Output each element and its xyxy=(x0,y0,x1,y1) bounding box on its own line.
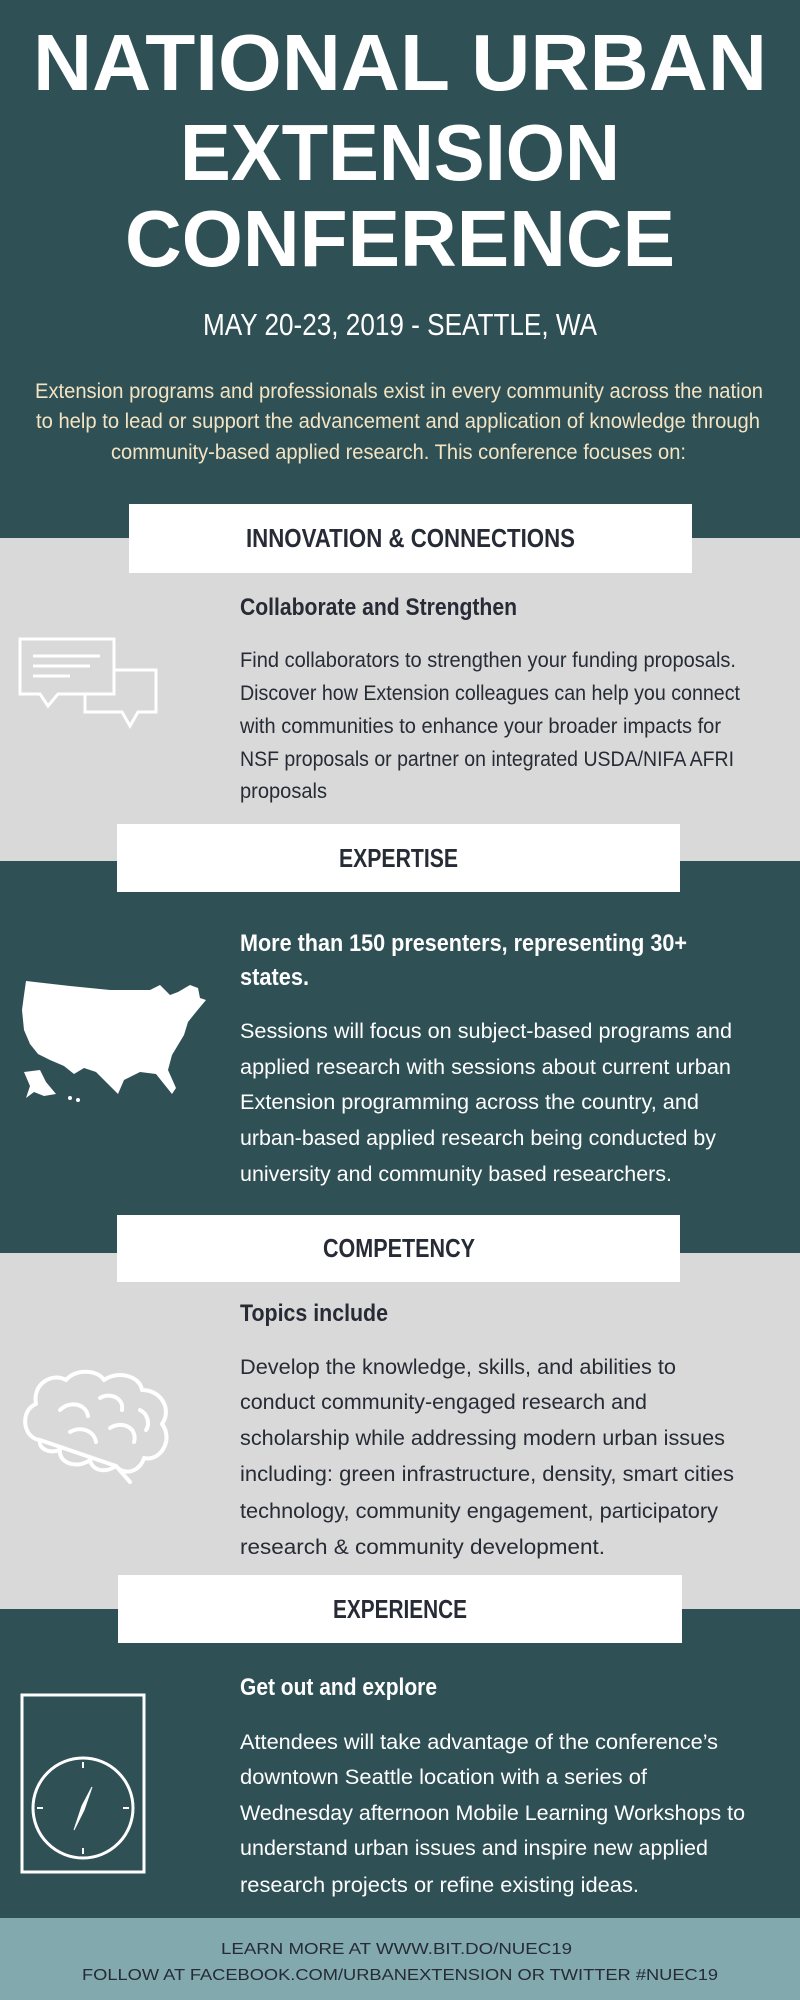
section 4 text xyxy=(240,1674,745,1897)
intro paragraph: to help to lead or support the advancement and application of knowledge through xyxy=(36,410,760,433)
section 3 text: Topics include xyxy=(240,1300,388,1327)
header box: expertise xyxy=(117,824,680,892)
footer band: LEARN MORE AT WWW.BIT.DO/NUEC19 xyxy=(221,1941,572,1958)
section 3 text: Develop the knowledge, skills, and abilities to xyxy=(240,1356,676,1379)
icon: chat bubbles xyxy=(20,639,156,726)
date and location: MAY 20-23, 2019 - SEATTLE, WA xyxy=(203,307,597,342)
footer band: FOLLOW AT FACEBOOK.COM/URBANEXTENSION OR TWITTER #NUEC19 xyxy=(82,1967,718,1984)
section 4 text: Wednesday afternoon Mobile Learning Workshops to xyxy=(240,1802,745,1825)
section 2 text: states. xyxy=(240,964,309,991)
header box: experience xyxy=(118,1575,682,1643)
section 2 text: Extension programming across the country, and xyxy=(240,1091,699,1114)
section 3 text: conduct community-engaged research and xyxy=(240,1391,647,1414)
title: NATIONAL URBAN xyxy=(33,18,767,107)
intro paragraph xyxy=(35,380,763,464)
section 1 text: proposals xyxy=(240,780,327,803)
section 4 text: research projects or refine existing ideas. xyxy=(240,1874,639,1897)
section 3 text: technology, community engagement, participatory xyxy=(240,1500,719,1523)
footer band xyxy=(0,1918,800,2000)
header box: innovation & connections: INNOVATION & CONNECTIONS xyxy=(246,523,575,553)
title: CONFERENCE xyxy=(125,194,675,283)
header box: expertise: EXPERTISE xyxy=(339,843,458,873)
icon: brain xyxy=(25,1372,167,1482)
section 1 text: NSF proposals or partner on integrated USDA/NIFA AFRI xyxy=(240,748,734,771)
header box: competency: COMPETENCY xyxy=(323,1233,475,1263)
intro paragraph: Extension programs and professionals exist in every community across the nation xyxy=(35,380,763,403)
icon: US map xyxy=(22,981,206,1102)
section 4 text: Attendees will take advantage of the conference’s xyxy=(240,1731,718,1754)
section 2 text: university and community based researchers. xyxy=(240,1163,672,1186)
section 4 text: Get out and explore xyxy=(240,1674,437,1701)
section 2 text: More than 150 presenters, representing 30+ xyxy=(240,930,687,957)
header box: competency xyxy=(117,1215,680,1282)
section 1 text xyxy=(239,594,740,803)
title: EXTENSION xyxy=(180,108,620,197)
section 1 text: Find collaborators to strengthen your funding proposals. xyxy=(240,649,736,672)
icon: compass xyxy=(22,1695,144,1872)
section 3 text: including: green infrastructure, density, smart cities xyxy=(240,1463,734,1486)
section 2 text: applied research with sessions about current urban xyxy=(240,1056,731,1079)
section 3 text: scholarship while addressing modern urban issues xyxy=(240,1427,725,1450)
section 3 text: research & community development. xyxy=(240,1536,605,1559)
header box: innovation & connections xyxy=(129,504,692,573)
section 1 text: Discover how Extension colleagues can help you connect xyxy=(240,682,740,705)
section 4 text: downtown Seattle location with a series of xyxy=(240,1766,647,1789)
section 2 text: urban-based applied research being conducted by xyxy=(240,1127,717,1150)
section 4 text: understand urban issues and inspire new applied xyxy=(240,1837,708,1860)
section 2 text: Sessions will focus on subject-based programs and xyxy=(240,1020,732,1043)
header box: experience: EXPERIENCE xyxy=(333,1594,467,1624)
section 2 text xyxy=(240,930,732,1186)
section 3 text xyxy=(240,1300,734,1559)
section 1 text: Collaborate and Strengthen xyxy=(240,594,517,621)
title xyxy=(33,18,767,283)
intro paragraph: community-based applied research. This conference focuses on: xyxy=(111,441,686,464)
section 1 text: with communities to enhance your broader impacts for xyxy=(239,715,721,738)
